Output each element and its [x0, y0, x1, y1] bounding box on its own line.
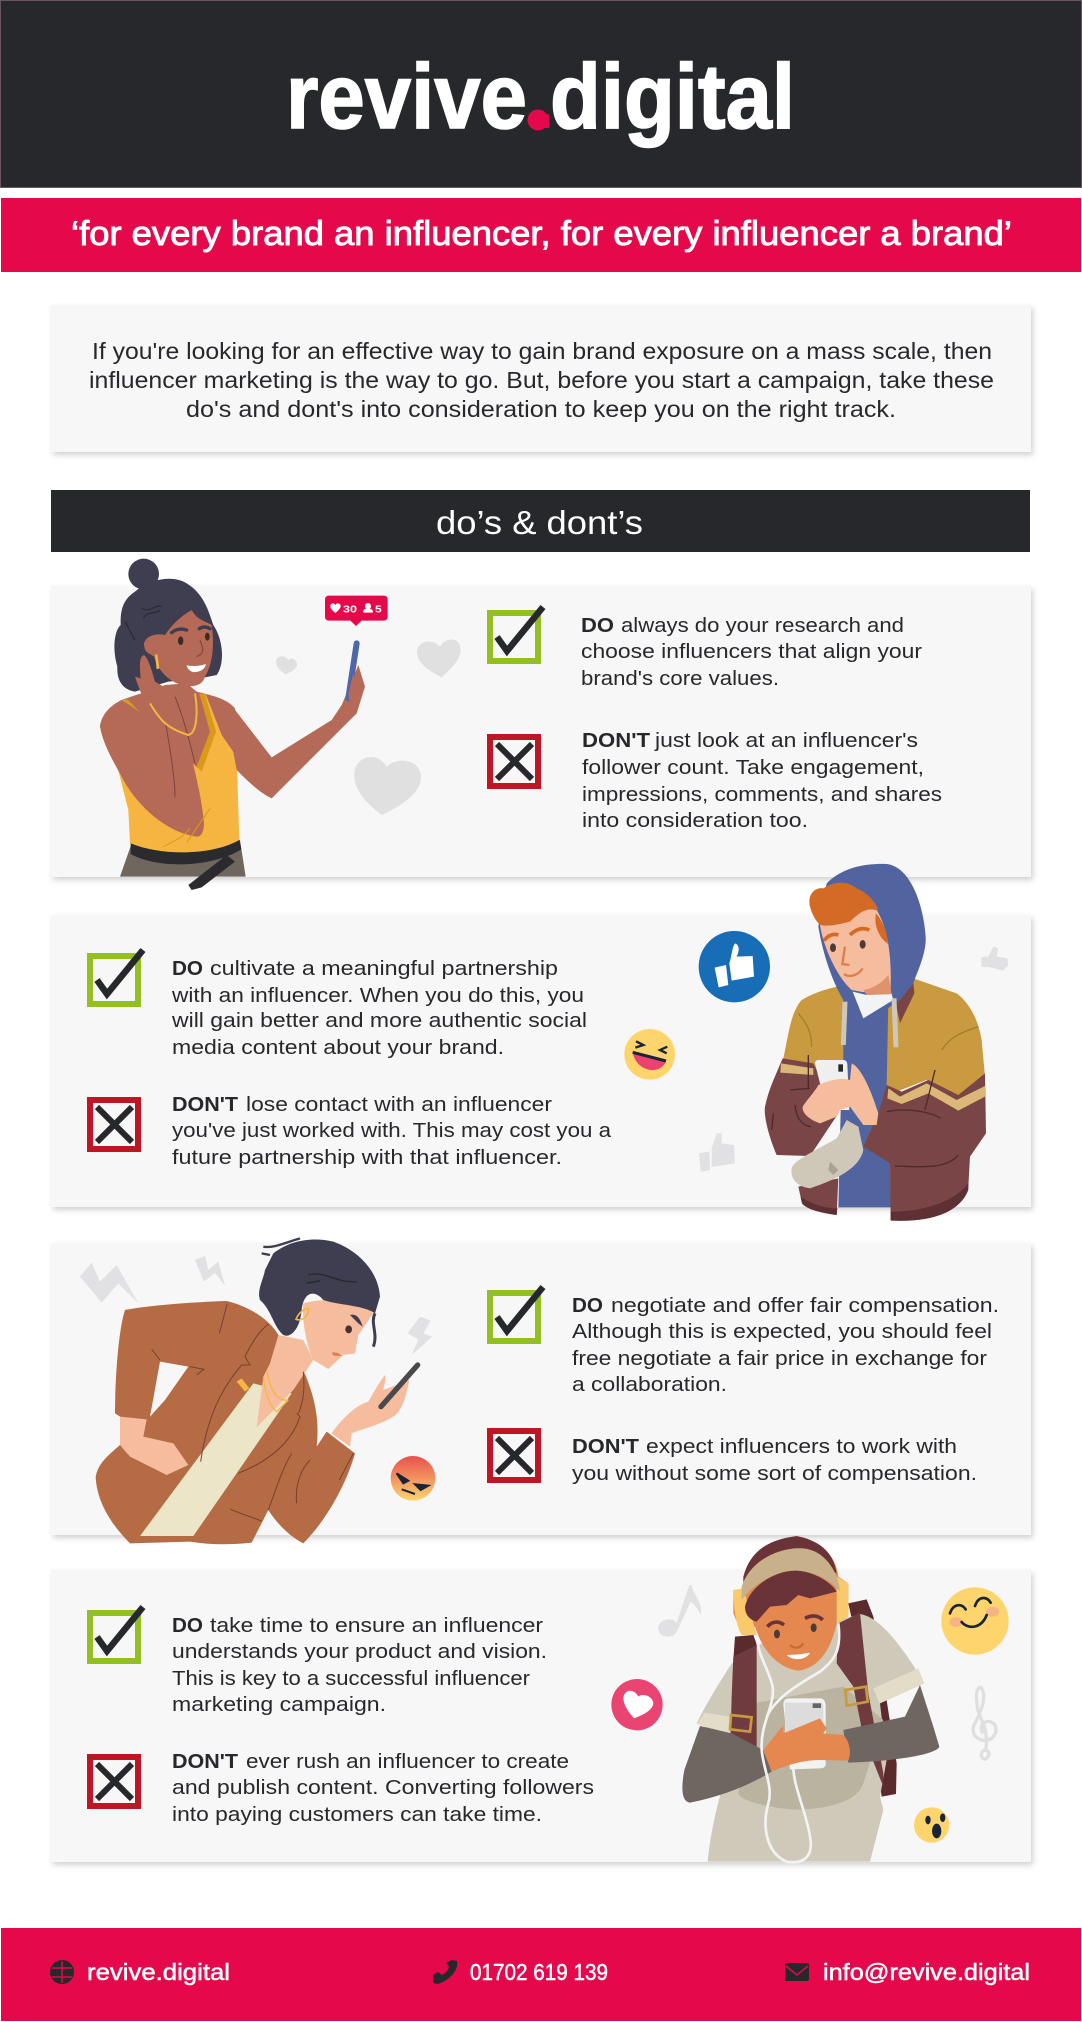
panel 2: partnership	[51, 864, 1031, 1221]
do icon: tick box	[90, 950, 143, 1004]
like counter badge	[325, 596, 388, 626]
do text: free negotiate a fair price in exchange for	[572, 1347, 987, 1370]
don't text: lose contact with an influencer	[246, 1093, 552, 1116]
do text: DO	[572, 1294, 603, 1317]
don't text: you've just worked with. This may cost you a	[172, 1119, 612, 1142]
don't text: into consideration too.	[582, 809, 808, 832]
intro panel: If you're looking for an effective way to gain brand exposure on a mass scale, then	[92, 338, 992, 364]
do text: always do your research and	[621, 614, 904, 637]
laughing emoji	[624, 1029, 675, 1080]
do text	[172, 1614, 547, 1716]
like icon	[699, 931, 770, 1002]
don't text	[172, 1093, 612, 1169]
logo: revive.digital	[286, 46, 795, 148]
do text: DO	[172, 957, 203, 980]
don't text	[582, 729, 942, 832]
don't text: into paying customers can take time.	[172, 1803, 542, 1826]
do text: This is key to a successful influencer	[172, 1667, 530, 1690]
treble clef	[973, 1687, 996, 1759]
don't text: expect influencers to work with	[646, 1435, 957, 1458]
do text: cultivate a meaningful partnership	[210, 957, 558, 980]
don't text	[172, 1750, 594, 1826]
illustration: man in hoodie with phone	[624, 864, 1008, 1221]
don't icon: cross box	[490, 1431, 538, 1480]
surprised emoji	[914, 1807, 949, 1843]
don't text: DON'T	[582, 729, 651, 752]
website: revive.digital	[87, 1959, 230, 1985]
do icon: tick box	[90, 1607, 143, 1661]
panel 4: understanding and patience	[51, 1536, 1031, 1862]
illustration: teen with headphones and phone	[611, 1536, 1009, 1862]
section heading bar: do’s & dont’s	[436, 504, 643, 541]
don't text: DON'T	[172, 1093, 238, 1116]
intro panel: do's and dont's into consideration to keep you on the right track.	[186, 396, 896, 422]
do text: brand's core values.	[581, 667, 779, 690]
do text	[572, 1294, 999, 1396]
tagline band: ‘for every brand an influencer, for every influencer a brand’	[71, 215, 1012, 253]
do text: marketing campaign.	[172, 1693, 386, 1716]
like counter badge: 30	[343, 604, 357, 615]
logo: revive.digital: revive	[286, 46, 527, 148]
smiling emoji	[941, 1587, 1009, 1655]
do text: media content about your brand.	[172, 1036, 504, 1059]
do text: take time to ensure an influencer	[210, 1614, 543, 1637]
do icon: tick box	[490, 607, 543, 661]
phone number: 01702 619 139	[470, 1959, 608, 1985]
panel 1: research and follower count	[51, 559, 1031, 890]
don't icon: cross box	[90, 1100, 138, 1149]
panel 3: compensation	[51, 1238, 1031, 1544]
illustration: woman taking a selfie	[100, 559, 461, 890]
don't icon: cross box	[490, 737, 538, 786]
do text: understands your product and vision.	[172, 1640, 547, 1663]
tagline band	[1, 198, 1081, 272]
do text: with an influencer. When you do this, you	[171, 984, 584, 1007]
don't text: DON'T	[572, 1435, 640, 1458]
music note	[658, 1585, 701, 1637]
do text: Although this is expected, you should feel	[572, 1320, 992, 1343]
intro panel	[51, 305, 1031, 452]
angry emoji	[391, 1456, 435, 1501]
do text	[171, 957, 587, 1059]
heart reaction	[611, 1679, 663, 1730]
don't text: DON'T	[172, 1750, 238, 1773]
do text: will gain better and more authentic social	[171, 1009, 587, 1032]
don't text	[572, 1435, 977, 1485]
icon: phone	[433, 1960, 457, 1984]
do text: choose influencers that align your	[581, 640, 922, 663]
icon: globe	[52, 1961, 72, 1983]
footer band	[1, 1928, 1081, 2021]
don't text: impressions, comments, and shares	[582, 783, 942, 806]
like counter badge: 5	[375, 604, 382, 615]
intro panel: influencer marketing is the way to go. But, before you start a campaign, take these	[89, 367, 994, 393]
don't text: just look at an influencer's	[654, 729, 918, 752]
logo: revive.digital: .	[530, 46, 556, 148]
email: info@revive.digital	[823, 1959, 1030, 1985]
illustration: angry woman with phone	[80, 1238, 435, 1544]
section heading bar	[51, 490, 1030, 552]
logo: revive.digital: digital	[550, 46, 795, 148]
do text: a collaboration.	[572, 1373, 727, 1396]
don't text: follower count. Take engagement,	[582, 756, 924, 779]
do text	[581, 614, 922, 690]
don't text: you without some sort of compensation.	[572, 1462, 977, 1485]
don't text: ever rush an influencer to create	[246, 1750, 569, 1773]
do text: DO	[172, 1614, 203, 1637]
don't icon: cross box	[90, 1757, 138, 1806]
do icon: tick box	[490, 1287, 543, 1341]
header banner	[0, 0, 1082, 188]
do text: negotiate and offer fair compensation.	[611, 1294, 999, 1317]
don't text: and publish content. Converting followers	[172, 1776, 594, 1799]
icon: envelope	[785, 1963, 809, 1981]
do text: DO	[581, 614, 614, 637]
don't text: future partnership with that influencer.	[172, 1146, 562, 1169]
